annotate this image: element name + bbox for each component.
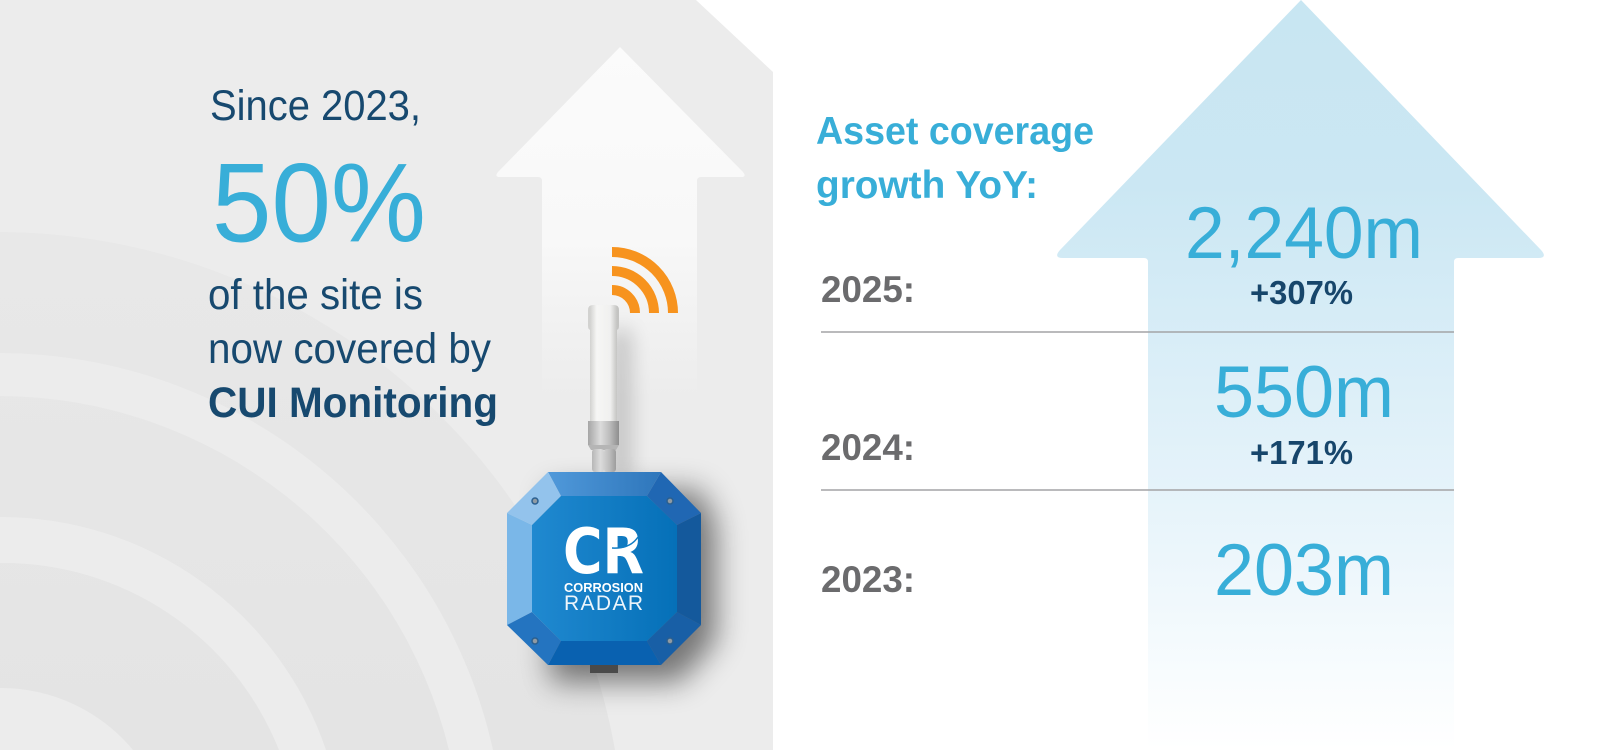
row: 2025: 2025:: [821, 269, 915, 310]
heading: since 2023: Since 2023,: [210, 82, 421, 130]
text block: site coverage: CUI Monitoring: [208, 379, 498, 427]
panel: left background: [0, 0, 773, 750]
device logo: RADAR: [564, 592, 643, 615]
signal waves: [612, 252, 673, 313]
icon: blue up arrow: [1057, 0, 1544, 750]
device logo: CR: [563, 515, 644, 588]
icon: corrosion radar sensor device: [507, 252, 716, 682]
row: 2024: [821, 352, 1394, 471]
text block: site coverage: of the site is: [208, 271, 423, 319]
icon: white up arrow: [496, 47, 745, 430]
device shadow: [550, 330, 716, 682]
text block: site coverage: now covered by: [208, 325, 491, 373]
row: 2024: 550m: [1214, 352, 1394, 433]
antenna: [588, 305, 619, 472]
divider lines: [821, 332, 1454, 490]
device logo: [563, 515, 644, 615]
text block: site coverage: [208, 271, 498, 427]
row: 2023: 203m: [1214, 530, 1394, 611]
device body: [507, 472, 701, 665]
device logo: CORROSION: [564, 580, 643, 595]
row: 2025: [821, 193, 1423, 311]
row: 2025: 2,240m: [1185, 193, 1423, 274]
row: 2025: +307%: [1250, 274, 1353, 311]
row: 2023: [821, 530, 1394, 611]
heading: asset coverage growth: growth YoY:: [816, 164, 1038, 207]
heading: asset coverage growth: Asset coverage: [816, 110, 1094, 153]
heading: asset coverage growth: [816, 110, 1094, 207]
row: 2024: +171%: [1250, 434, 1353, 471]
row: 2024: 2024:: [821, 427, 915, 468]
big stat: 50 percent: 50%: [212, 140, 426, 266]
bottom connector: [590, 664, 618, 673]
row: 2023: 2023:: [821, 559, 915, 600]
